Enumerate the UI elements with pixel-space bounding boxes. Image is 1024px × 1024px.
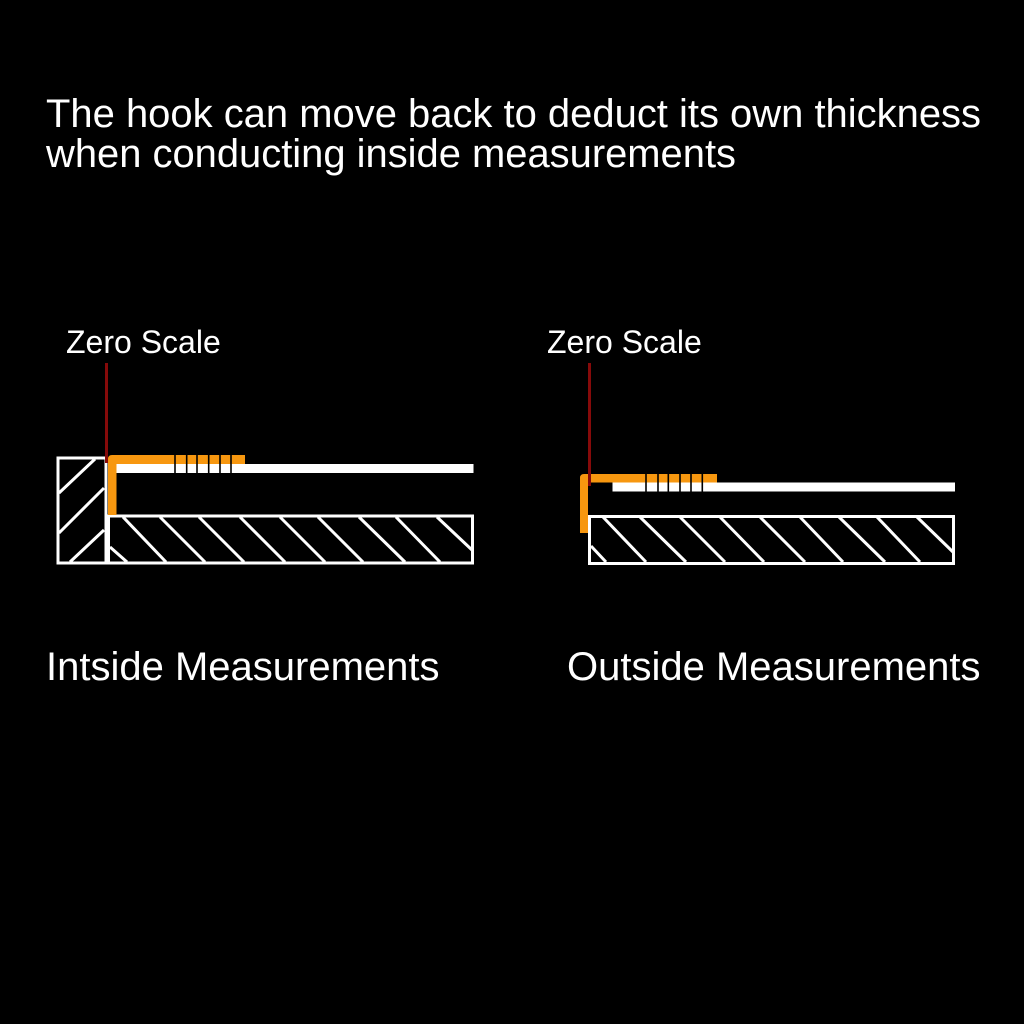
label: zero scale right: Zero Scale [547,324,702,360]
workpiece with hatching right [590,516,954,564]
zero scale line right [588,363,591,486]
label: zero scale left: Zero Scale [66,324,221,360]
caption: outside: Outside Measurements [567,645,981,689]
title: The hook can move back to deduct its own thickness [46,92,981,136]
title: when conducting inside measurements [45,132,736,176]
caption: inside: Intside Measurements [46,645,440,689]
diagram: outside measurements [547,324,955,564]
scale ticks [175,455,231,473]
title [45,92,981,176]
zero scale line [105,363,108,463]
tape blade [116,464,474,473]
diagram: inside measurements [58,324,474,563]
orange hook right [580,474,717,533]
tape blade right [612,482,955,492]
orange hook [108,455,245,515]
wall block with hatching [58,458,106,563]
workpiece with hatching [106,516,472,563]
scale ticks right [646,474,702,492]
